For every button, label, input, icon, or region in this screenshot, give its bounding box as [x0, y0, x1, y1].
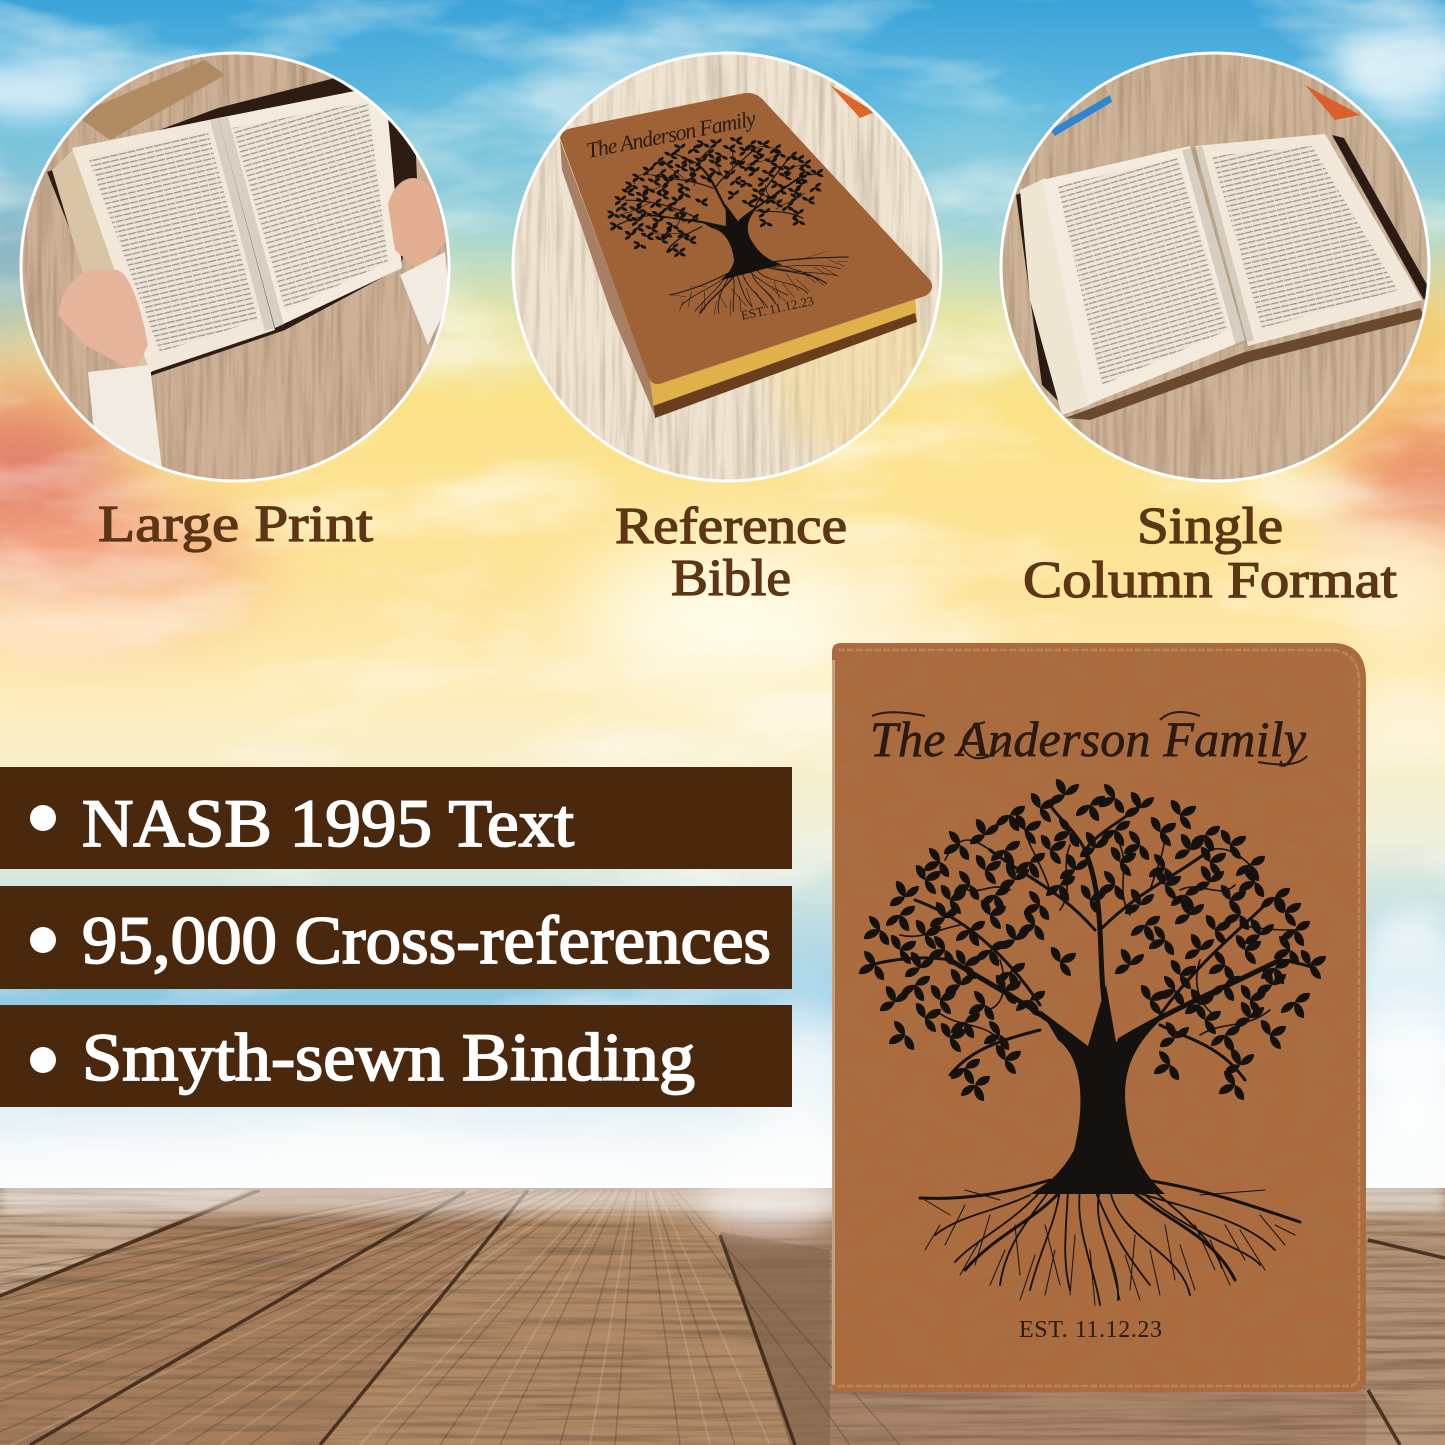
label: single column format: [1023, 498, 1398, 609]
feature bar: NASB 1995 Text: [0, 767, 792, 869]
feature bar: 95,000 Cross-references: [0, 886, 792, 989]
large leather bible cover: [829, 640, 1370, 1395]
label: large print: Large Print: [98, 496, 374, 553]
wood grain: [0, 1190, 1445, 1445]
label: single column format: Single: [1137, 498, 1283, 555]
label: reference bible: Bible: [671, 550, 791, 607]
feature bar: Smyth-sewn Binding: Smyth-sewn Binding: [82, 1019, 695, 1095]
photo circle: leather bible on white wood: [510, 50, 950, 485]
label: reference bible: Reference: [615, 498, 847, 555]
wood table: [0, 1188, 1445, 1445]
feature bar: NASB 1995 Text: NASB 1995 Text: [82, 785, 574, 861]
feature bar: 95,000 Cross-references: 95,000 Cross-references: [82, 902, 771, 978]
photo circle: large print open bible held by hands: [20, 50, 450, 485]
photo circle: single column open bible: [1000, 50, 1435, 485]
label: single column format: Column Format: [1023, 552, 1398, 609]
cover: [560, 93, 932, 384]
tree of life engraving: [859, 779, 1326, 1305]
feature bar: Smyth-sewn Binding: [0, 1005, 792, 1107]
open book: [47, 78, 418, 376]
sleeves: [88, 365, 162, 470]
cover inscription: family name: The Anderson Family: [870, 711, 1307, 767]
label: reference bible: [615, 498, 847, 607]
cover inscription: established date: EST. 11.12.23: [1019, 1317, 1162, 1343]
spine: [560, 140, 655, 416]
hands: [58, 269, 148, 372]
photo circle: leather bible on white wood: EST. 11.12.23: [740, 293, 815, 323]
pages: [1042, 146, 1245, 405]
gold page block: [650, 295, 917, 418]
photo circle: leather bible on white wood: The Anderson Family: [584, 106, 758, 163]
cover and page block: [1016, 193, 1058, 402]
